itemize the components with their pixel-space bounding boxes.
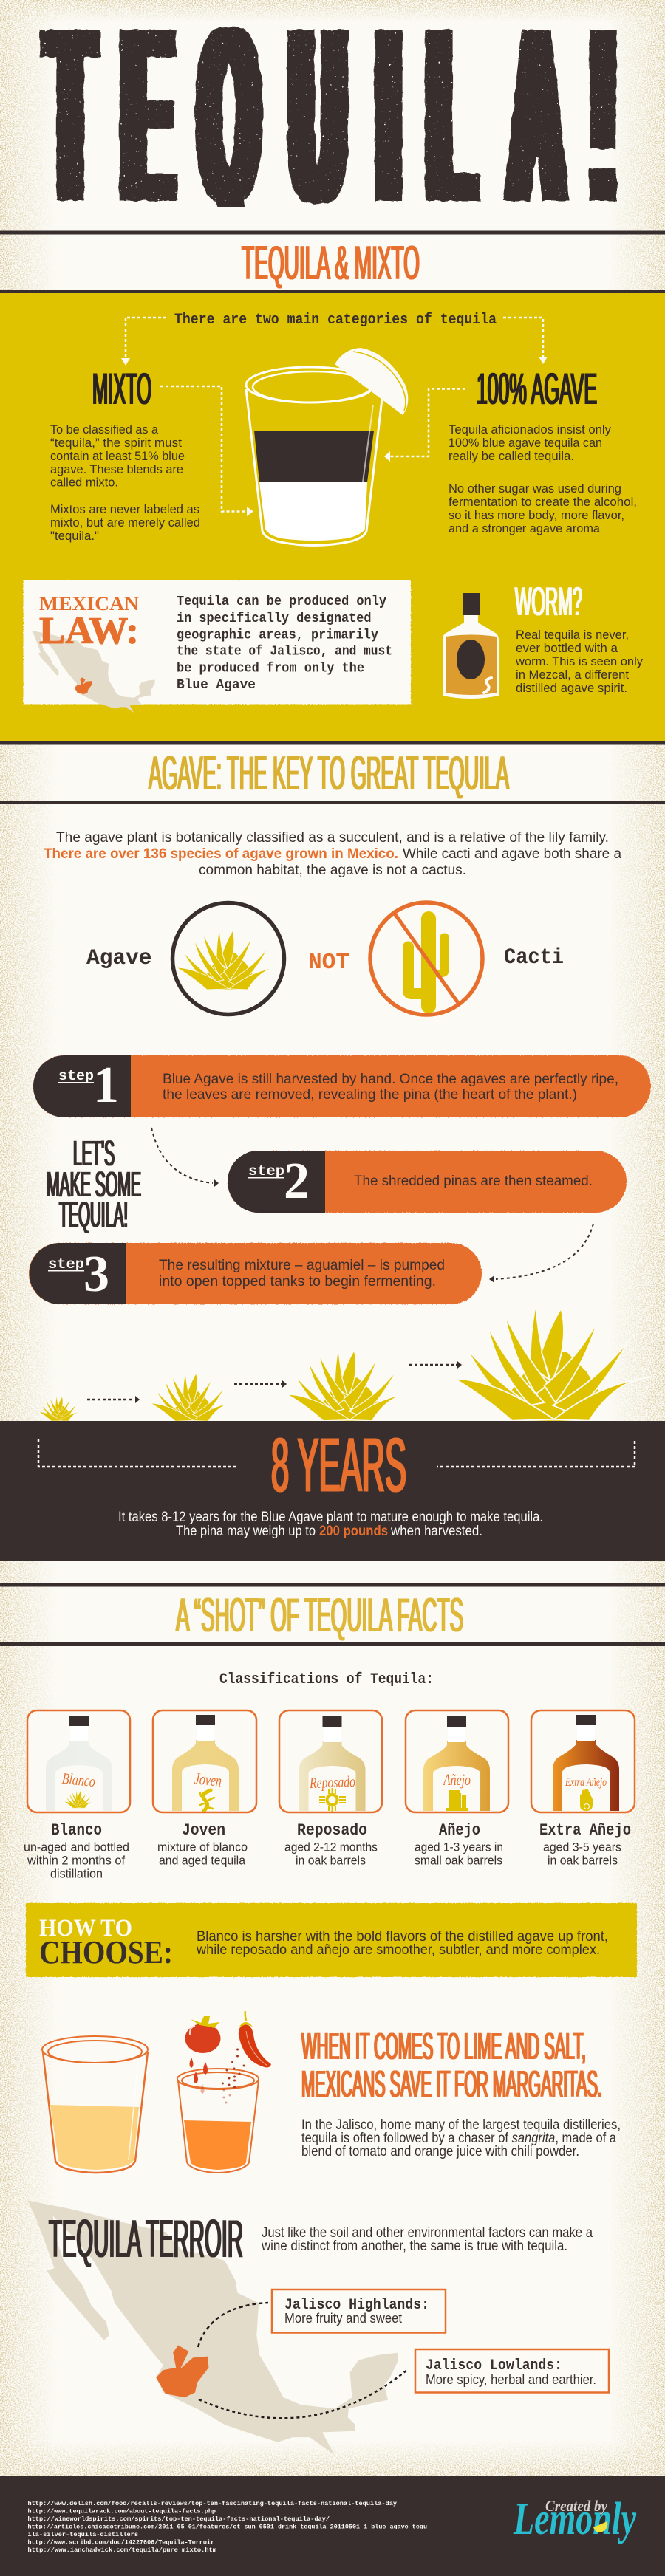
- text: terroir description: [261, 2225, 593, 2254]
- step 1 pill: [33, 1055, 651, 1117]
- footer: [0, 2476, 665, 2576]
- agave growth sequence: [39, 1304, 651, 1421]
- source links: http://wineworldspirits.com/spirits/top-ten-tequila-facts-national-tequila-day/: [28, 2515, 330, 2523]
- classification: reposado: Reposado: [297, 1821, 367, 1840]
- text: law description: in specifically designated: [177, 611, 371, 626]
- text: terroir description: Just like the soil and other environmental factors can make a: [262, 2225, 593, 2241]
- text: 8 years description: 200 pounds: [319, 1524, 388, 1539]
- label: not: NOT: [308, 950, 349, 976]
- bottle: anejo: [423, 1716, 490, 1811]
- icon: layered tequila glass with lime: [246, 348, 408, 545]
- bottle label: extra anejo: Extra Añejo: [565, 1776, 607, 1789]
- text: worm description: ever bottled with a: [516, 641, 618, 655]
- text: sangrita description: blend of tomato and orange juice with chili powder.: [301, 2144, 579, 2159]
- text: 8 years description: when harvested.: [390, 1524, 482, 1539]
- classification: anejo: aged 1-3 years in: [415, 1840, 503, 1854]
- icon: tomato: [185, 2016, 220, 2053]
- card: reposado: [279, 1710, 382, 1812]
- text: law description: Tequila can be produced only: [177, 594, 386, 609]
- source links: ila-silver-tequila-distillers: [28, 2531, 138, 2538]
- classification: joven: Joven: [182, 1821, 225, 1840]
- text: law description: the state of Jalisco, and must: [177, 644, 392, 660]
- step label 1: step: [58, 1068, 94, 1084]
- dashed bracket right: [437, 1441, 635, 1467]
- bottle: joven: [172, 1715, 239, 1811]
- arrow: step 1 to step 2: [151, 1128, 219, 1187]
- icon: chili pepper: [239, 2011, 271, 2067]
- panel: tequila and mixto: [0, 293, 665, 741]
- text: mixto description: called mixto.: [50, 476, 118, 489]
- arrow: categories to mixto: [121, 318, 166, 366]
- callout: jalisco highlands: [272, 2289, 446, 2332]
- text: mixto description: "tequila.": [50, 529, 99, 543]
- heading: lime and salt: [301, 2025, 602, 2105]
- text: TEQUILA & MIXTO: [242, 236, 420, 290]
- arrow: growth 3: [409, 1361, 462, 1368]
- label: law: LAW:: [39, 610, 139, 652]
- classification: reposado: [284, 1821, 378, 1867]
- callout: jalisco highlands: Jalisco Highlands:: [284, 2297, 429, 2314]
- heading: let's make some tequila: [47, 1134, 141, 1235]
- dashed bracket left: [38, 1439, 239, 1467]
- text: law description: [177, 594, 392, 693]
- arrow: categories to agave: [503, 318, 548, 364]
- text: worm description: distilled agave spirit.: [516, 681, 627, 695]
- heading: classifications: Classifications of Tequila:: [219, 1671, 434, 1688]
- text: worm description: worm. This is seen only: [515, 654, 643, 668]
- classification: blanco: Blanco: [51, 1821, 102, 1840]
- text: agave introduction: There are over 136 species of agave grown in Mexico.: [44, 846, 398, 862]
- icon: gecko: [200, 1790, 214, 1811]
- label: mexican: MEXICAN: [39, 593, 139, 614]
- panel: 8 years: [0, 1421, 665, 1561]
- text: sangrita description: [301, 2117, 621, 2159]
- classification: joven: [157, 1821, 248, 1867]
- source links: http://www.tequilarack.com/about-tequila-facts.php: [28, 2508, 216, 2515]
- icon: large agave: [454, 1304, 651, 1421]
- icon: crossed-out cactus: [370, 902, 482, 1015]
- panel: tequila and mixto: MIXTO: [92, 364, 151, 414]
- heading: let's make some tequila: TEQUILA!: [59, 1196, 128, 1235]
- card: joven: [153, 1710, 256, 1812]
- bottle label: joven: Joven: [194, 1769, 222, 1790]
- map: mexico with jalisco: [32, 631, 155, 713]
- text: how to choose description: [196, 1929, 608, 1958]
- callout: jalisco lowlands: More spicy, herbal and earthier.: [426, 2372, 596, 2387]
- callout: jalisco lowlands: [415, 2349, 609, 2393]
- icon: medium agave: [287, 1348, 411, 1421]
- arrow: jalisco to highlands: [198, 2303, 268, 2347]
- step 2 text: The shredded pinas are then steamed.: [354, 1174, 593, 1189]
- card: blanco: [27, 1710, 130, 1812]
- callout: mexican law: [24, 580, 411, 713]
- text: agave description: so it has more body, more flavor,: [449, 508, 624, 522]
- classification: anejo: [415, 1821, 503, 1867]
- step number 3: 3: [83, 1246, 109, 1303]
- categories intro line: There are two main categories of tequila: [174, 312, 497, 329]
- bottle label: reposado: Reposado: [309, 1772, 355, 1792]
- arrow: step 2 to step 3: [489, 1224, 593, 1283]
- icon: zia sun: [319, 1788, 346, 1812]
- text: agave description: fermentation to create the alcohol,: [449, 495, 637, 509]
- text: how to choose description: Blanco is harsher with the bold flavors of the distilled agave up front,: [197, 1929, 608, 1945]
- text: 8 years description: The pina may weigh up to: [176, 1524, 316, 1539]
- icon: large glass: [42, 2036, 148, 2173]
- arrow: growth 2: [234, 1380, 287, 1388]
- text: agave introduction: The agave plant is botanically classified as a succulent, and is a relative of the lily family.: [56, 830, 609, 846]
- text: worm description: in Mezcal, a different: [516, 668, 629, 682]
- callout: jalisco highlands: More fruity and sweet: [284, 2311, 402, 2326]
- label: agave: Agave: [86, 946, 152, 971]
- step number 1: 1: [93, 1057, 119, 1114]
- step 3 text: into open topped tanks to begin fermenting.: [159, 1274, 436, 1289]
- classification: extra anejo: aged 3-5 years: [543, 1840, 621, 1854]
- text: mixto description: mixto, but are merely called: [50, 515, 200, 530]
- step number 2: 2: [284, 1153, 310, 1210]
- step 1 text: Blue Agave is still harvested by hand. Once the agaves are perfectly ripe,: [163, 1072, 618, 1087]
- text: sangrita description: In the Jalisco, home many of the largest tequila distilleries,: [301, 2117, 621, 2133]
- text: 8 years description: It takes 8-12 years for the Blue Agave plant to mature enough to make tequila.: [118, 1510, 543, 1525]
- icon: agave on blanco: [64, 1790, 95, 1808]
- text: sangrita description: tequila is often followed by a chaser of sangrita, made of a: [301, 2131, 616, 2146]
- icon: agave in circle: [173, 902, 284, 1015]
- source links: http://articles.chicagotribune.com/2011-05-01/features/ct-sun-0501-drink-tequila-20110501_1_blue-agave-tequ: [28, 2523, 427, 2530]
- step 3 text: [159, 1258, 445, 1289]
- step 2 pill: [228, 1151, 627, 1213]
- text: agave introduction: common habitat, the agave is not a cactus.: [199, 863, 466, 878]
- text: agave description: and a stronger agave aroma: [449, 521, 601, 535]
- step 3 pill: [29, 1243, 482, 1304]
- bottle label: blanco: Blanco: [61, 1770, 96, 1790]
- arrow: jalisco to lowlands: [199, 2370, 407, 2418]
- icon: small agave: [151, 1371, 234, 1421]
- icon: worm bottle: [443, 593, 499, 699]
- step label 2: step: [248, 1163, 284, 1179]
- icon: still: [446, 1790, 468, 1811]
- text: mixto description: [50, 422, 200, 543]
- classification: blanco: distillation: [50, 1867, 103, 1880]
- text: agave introduction: [44, 830, 621, 878]
- card: extra anejo: [531, 1710, 635, 1812]
- text: worm description: Real tequila is never,: [516, 628, 629, 642]
- classification: reposado: aged 2-12 months: [284, 1840, 378, 1854]
- text: mixto description: contain at least 51% blue: [50, 449, 185, 463]
- text: mixto description: agave. These blends are: [50, 462, 183, 476]
- classification: extra anejo: [539, 1821, 631, 1867]
- classification: extra anejo: Extra Añejo: [539, 1821, 631, 1840]
- text: how to choose description: while reposado and añejo are smoother, subtler, and more complex.: [196, 1942, 600, 1958]
- classification: reposado: in oak barrels: [296, 1854, 366, 1867]
- classification: anejo: Añejo: [439, 1821, 480, 1840]
- text: law description: be produced from only the: [177, 661, 364, 676]
- classification: blanco: within 2 months of: [27, 1854, 125, 1867]
- callout: jalisco lowlands: Jalisco Lowlands:: [426, 2357, 562, 2374]
- text: worm description: [515, 628, 643, 695]
- source links: http://www.scribd.com/doc/14227606/Tequila-Terroir: [28, 2539, 214, 2546]
- source links: [28, 2500, 427, 2554]
- step 1 text: the leaves are removed, revealing the pina (the heart of the plant.): [163, 1087, 577, 1103]
- classification: joven: and aged tequila: [159, 1854, 245, 1867]
- source links: http://www.ianchadwick.com/tequila/pure_mixto.htm: [28, 2546, 216, 2554]
- classification: joven: mixture of blanco: [157, 1840, 248, 1854]
- step label 3: step: [48, 1256, 84, 1272]
- text: mixto description: “tequila,” the spirit must: [50, 436, 182, 450]
- text: agave description: [449, 422, 637, 535]
- text: mixto description: Mixtos are never labeled as: [50, 502, 200, 516]
- classification: blanco: [24, 1821, 129, 1880]
- label: choose: CHOOSE:: [39, 1934, 173, 1970]
- icon: chili powder: [222, 2049, 245, 2103]
- bottle: reposado: [299, 1716, 365, 1811]
- text: agave description: No other sugar was used during: [449, 482, 621, 496]
- heading: let's make some tequila: LET'S: [73, 1134, 115, 1174]
- text: law description: geographic areas, primarily: [177, 628, 378, 643]
- text: agave description: really be called tequila.: [449, 449, 574, 463]
- text: MAKE SOME: [47, 1165, 141, 1205]
- step 1 text: [163, 1072, 618, 1103]
- map: mexico terroir: [27, 2201, 398, 2455]
- text: agave introduction: While cacti and agave both share a: [403, 846, 621, 862]
- arrow: mixto to glass: [160, 386, 253, 516]
- classification: blanco: un-aged and bottled: [24, 1840, 129, 1854]
- classification: anejo: small oak barrels: [415, 1854, 502, 1867]
- icon: smallest agave: [39, 1396, 81, 1421]
- text: TEQUILA TERROIR: [49, 2210, 243, 2269]
- card: anejo: [406, 1710, 508, 1812]
- bottle: blanco: [46, 1716, 112, 1811]
- classification: extra anejo: in oak barrels: [548, 1854, 618, 1867]
- step 3 text: The resulting mixture – aguamiel – is pumped: [159, 1258, 445, 1273]
- label: how to: HOW TO: [39, 1915, 132, 1942]
- callout: how to choose: [26, 1903, 637, 1977]
- arrow: agave to glass: [384, 388, 466, 462]
- text: mixto description: To be classified as a: [50, 422, 159, 436]
- bottle: extra anejo: [553, 1715, 619, 1811]
- icon: falling drops: [189, 2058, 208, 2094]
- source links: http://www.delish.com/food/recalls-reviews/top-ten-fascinating-tequila-facts-national-tequila-day: [28, 2500, 397, 2507]
- text: agave description: 100% blue agave tequila can: [449, 436, 602, 450]
- logo: created by lemonly: Created by: [545, 2497, 608, 2515]
- arrow: growth 1: [87, 1396, 140, 1403]
- icon: small glass: [177, 2069, 259, 2173]
- bottle label: anejo: Añejo: [443, 1770, 471, 1789]
- text: law description: Blue Agave: [177, 677, 256, 693]
- text: 8 years description: [118, 1510, 543, 1539]
- panel: 8 years: 8 YEARS: [271, 1422, 406, 1507]
- text: terroir description: wine distinct from another, the same is true with tequila.: [261, 2238, 567, 2254]
- icon: hand: [580, 1789, 593, 1811]
- text: agave description: Tequila aficionados insist only: [449, 422, 611, 436]
- label: cacti: Cacti: [504, 945, 564, 970]
